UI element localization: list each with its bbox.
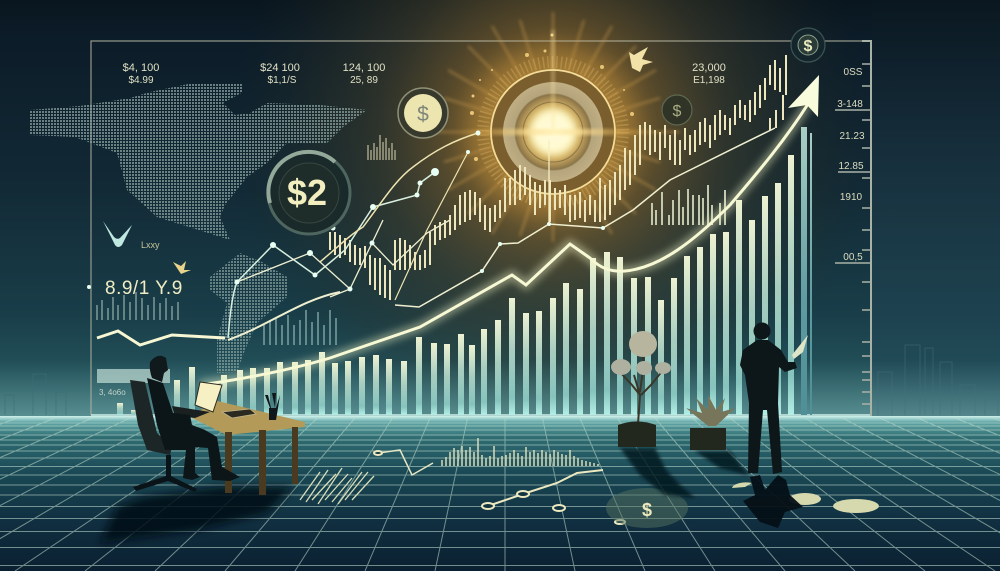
right axis: 1910 [840, 192, 863, 203]
man shadow [743, 475, 803, 528]
floor [0, 416, 1000, 571]
label: lower figure: 3, 4o6o [99, 388, 126, 397]
icon: gold bird left [173, 261, 191, 274]
sun burst [460, 30, 650, 217]
plant shadow [695, 451, 748, 475]
bar chart [97, 127, 812, 415]
coin: $2: $2 [287, 172, 327, 213]
person at desk [130, 356, 305, 495]
small candle chart top [368, 135, 395, 160]
tree shadow [620, 448, 695, 498]
candlestick chart [330, 55, 786, 300]
header figures: $1,1/S [268, 75, 297, 86]
desk [192, 400, 305, 435]
sun rays [424, 12, 680, 242]
header figures: $24 100 [260, 62, 300, 74]
golden glow [0, 0, 1000, 420]
floor line chart with nodes [374, 451, 625, 524]
floor grid [0, 418, 1000, 571]
coin: $2 [268, 152, 350, 234]
right axis: 21.23 [839, 131, 865, 142]
faint skyline bars left [5, 374, 66, 415]
header figures [123, 62, 726, 86]
head [150, 356, 168, 382]
paper [792, 335, 808, 359]
horizon glow [0, 360, 1000, 420]
dotted world map [30, 83, 367, 373]
coin: dollar top right: $ [804, 38, 813, 55]
chart nodes [87, 130, 605, 292]
potted agave [686, 395, 735, 450]
sun spark dots [470, 34, 634, 161]
small bar chart mid [264, 310, 336, 345]
small bar chart left [97, 292, 178, 320]
panel frame [91, 41, 870, 415]
floor chart: slanted sticks [300, 468, 374, 504]
right axis: 00,5 [843, 252, 863, 263]
potted tree [611, 331, 671, 447]
floor line chart left [378, 450, 433, 475]
coin: dollar cream: $ [417, 103, 429, 126]
header figures: 23,000 [692, 62, 726, 74]
floor chart: bars [442, 438, 598, 466]
floor coins [732, 482, 879, 513]
floor dollar patch: $ [642, 500, 652, 520]
right axis: 0SS [844, 67, 863, 78]
coin: dollar small: $ [673, 103, 682, 120]
pen cup [265, 393, 280, 420]
icon: gold bird top [629, 47, 653, 72]
coin: dollar top right [791, 28, 825, 62]
floor dollar patch [606, 488, 688, 528]
book [222, 409, 256, 418]
header figures: E1,198 [693, 75, 725, 86]
standing man [740, 322, 808, 474]
header figures: $4.99 [128, 75, 154, 86]
laptop [195, 382, 222, 412]
thin trend lines [228, 128, 775, 340]
body [147, 378, 240, 481]
header figures: 124, 100 [343, 62, 385, 74]
background wall [0, 0, 1000, 420]
label: big figure: 8.9/1 Y.9 [105, 278, 183, 299]
right axis: 12.85 [838, 161, 864, 172]
small bar chart centre right [652, 185, 725, 225]
coin: dollar small [662, 95, 692, 125]
coin: dollar cream [398, 88, 448, 138]
header figures: $4, 100 [123, 62, 159, 74]
right axis: 3-148 [837, 99, 863, 110]
faint skyline bars right [878, 345, 998, 415]
label: Lxxy: Lxxy [141, 240, 160, 250]
header figures: 25, 89 [350, 75, 378, 86]
chair [130, 380, 172, 455]
desk shadow [100, 487, 293, 543]
icon: teal check [103, 221, 132, 247]
main rising arrow [97, 75, 819, 385]
right axis [835, 41, 871, 416]
